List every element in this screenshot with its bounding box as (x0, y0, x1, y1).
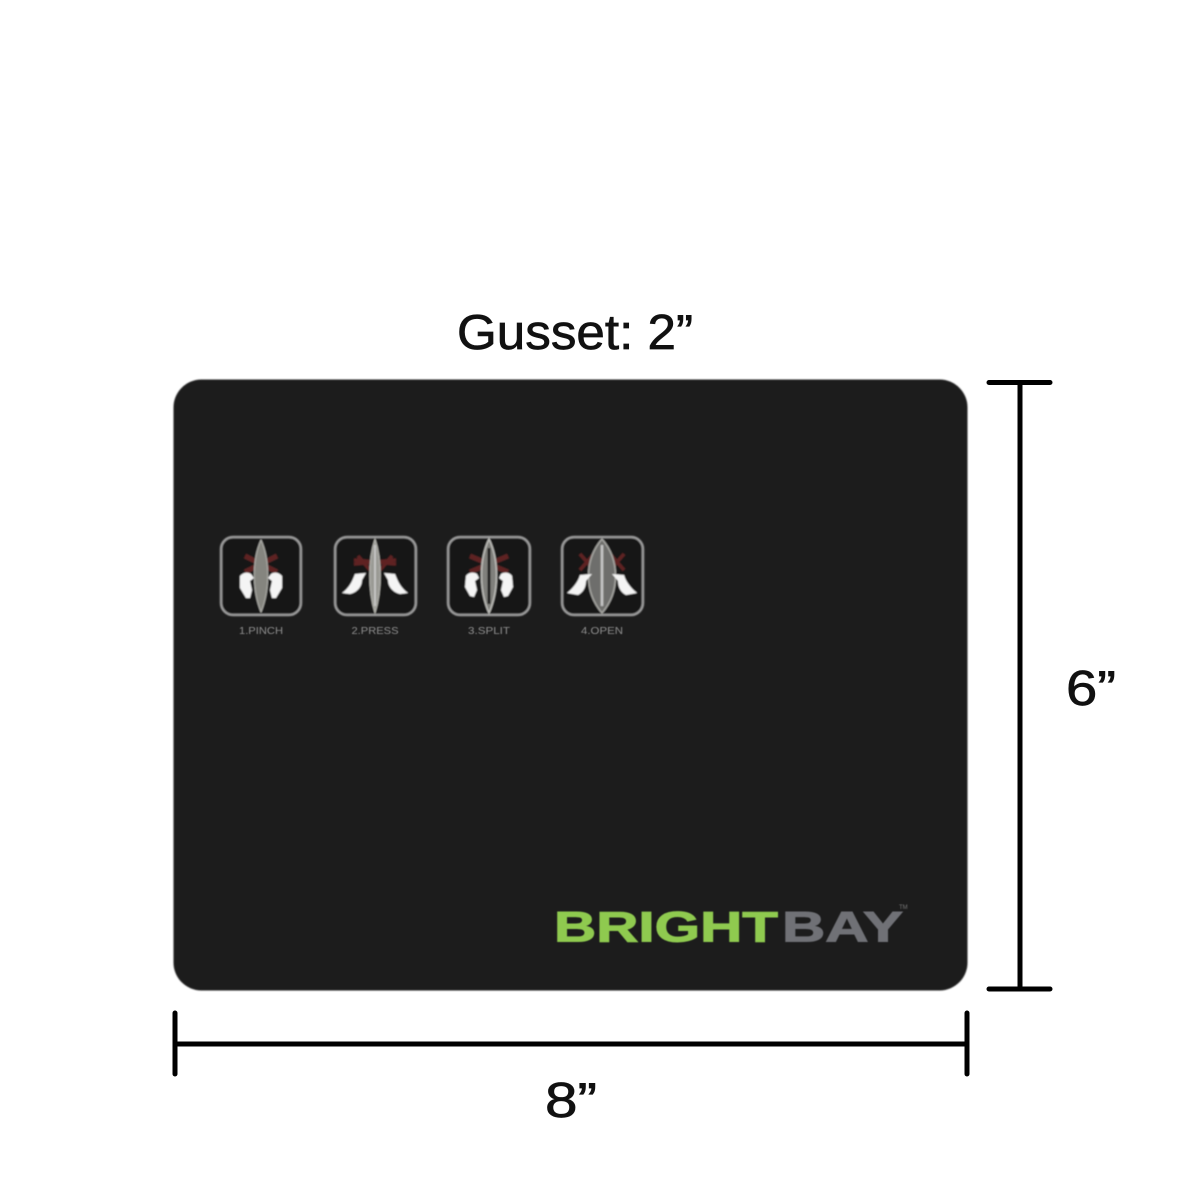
logo: BrightBay: BRIGHT (554, 904, 778, 952)
icon: step 4 open (562, 537, 643, 615)
label: 1.pinch: 1.PINCH (239, 626, 283, 637)
dimension arrow: height (989, 382, 1050, 989)
panel: black bag (174, 380, 968, 990)
dimension label: 8 inches: 8” (545, 1074, 597, 1128)
heading: gusset size: Gusset: 2” (457, 306, 693, 360)
icon: step 2 press (335, 537, 416, 615)
icon: step 1 pinch (221, 537, 301, 615)
logo: BrightBay: TM (899, 905, 908, 911)
icon: step 3 split (448, 537, 530, 615)
label: 4.open: 4.OPEN (581, 626, 623, 637)
logo: BrightBay: BAY (782, 904, 903, 952)
dimension arrow: width (175, 1013, 967, 1074)
label: 2.press: 2.PRESS (352, 626, 399, 637)
dimension label: 6 inches: 6” (1066, 662, 1116, 716)
label: 3.split: 3.SPLIT (468, 626, 510, 637)
logo: BrightBay (554, 904, 908, 952)
